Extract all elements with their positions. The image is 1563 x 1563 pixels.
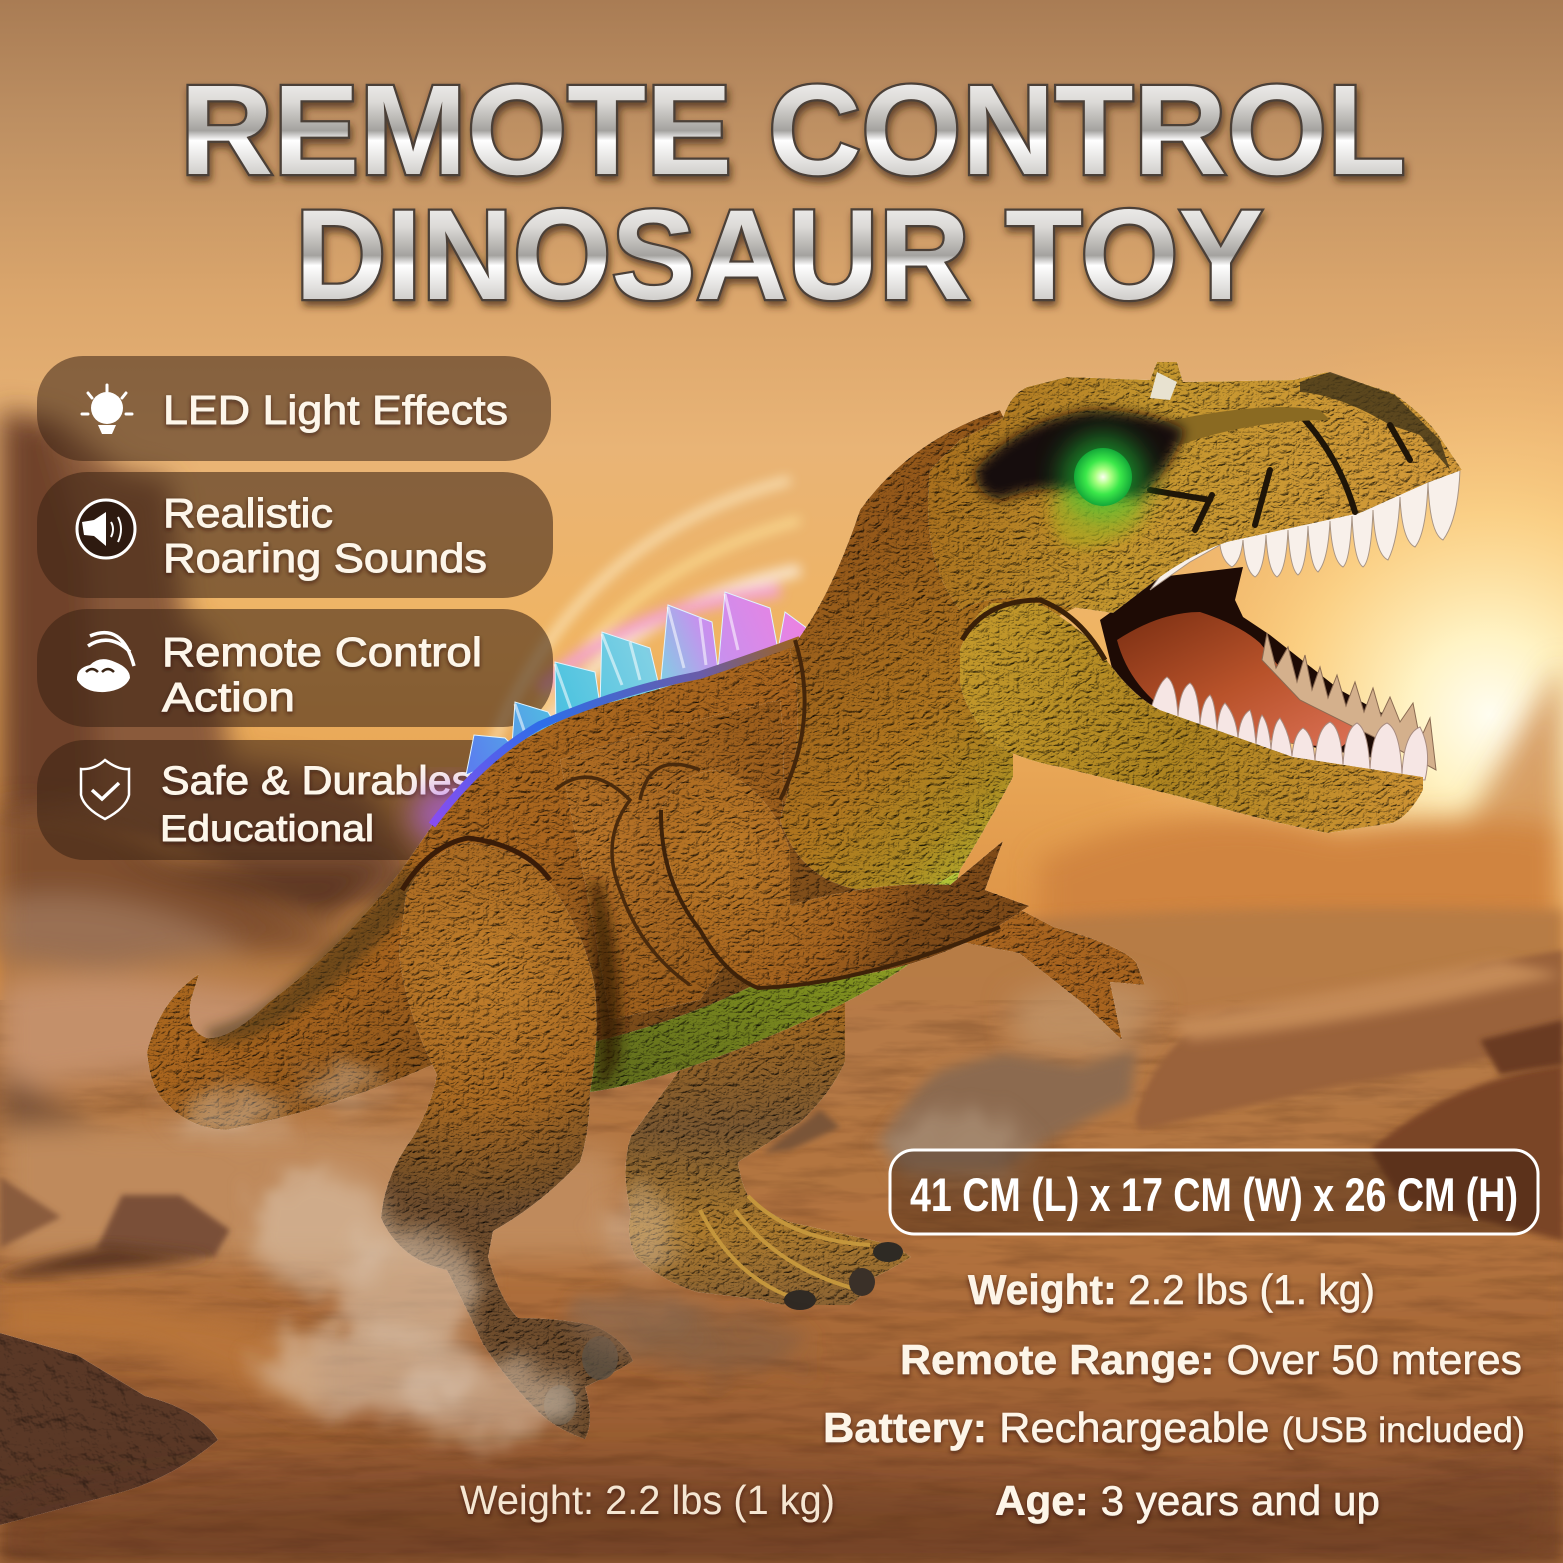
blue LED back edge [432, 640, 800, 825]
specifications list: Remote Range: Over 50 mteres [900, 1336, 1522, 1383]
far lower teeth [1262, 633, 1436, 770]
dust clouds [170, 1067, 1030, 1440]
cheek yellow-green highlight [1050, 492, 1142, 548]
neck [780, 410, 1090, 892]
specifications list: Battery: Rechargeable (USB included) [823, 1404, 1525, 1451]
tongue [1117, 612, 1380, 748]
arm shadow line [661, 810, 1000, 988]
text: Safe and Durables, Educational: Safe & Durables [161, 759, 473, 803]
brow ridge [1150, 407, 1330, 445]
background: sand ground [0, 826, 1563, 1563]
thigh contact shadow [590, 880, 621, 1095]
dorsal LED crystal spikes [466, 592, 812, 775]
panel: Realistic Roaring Sounds [37, 472, 553, 598]
tail dark back shading [205, 865, 425, 1045]
jaw joint shadow [962, 600, 1105, 660]
rocks: right boulders [763, 950, 1563, 1240]
background: distant mesas [0, 410, 1563, 960]
icon: speaker [77, 500, 135, 558]
upper teeth [1150, 470, 1460, 590]
near foot claws [544, 1336, 618, 1425]
far foot toes and claws [700, 1196, 903, 1310]
background: sun glow [1090, 315, 1563, 1115]
text: Safe and Durables, Educational: Educational [160, 808, 374, 849]
thigh crease [402, 838, 550, 890]
shoulder and arm [661, 770, 1029, 988]
background: desert sky [0, 0, 1563, 1000]
neck fold line [780, 640, 805, 800]
icon: remote signal [77, 633, 134, 692]
text: Safe and Durables, Educational [160, 759, 473, 849]
specifications list [823, 1266, 1525, 1524]
background: foreground sand shading [0, 1450, 1563, 1563]
dinosaur toy [147, 362, 1462, 1439]
lower jaw [960, 603, 1423, 833]
background: sand ripples [0, 1000, 1563, 1563]
title: DINOSAUR TOY [295, 184, 1263, 327]
flank light [560, 700, 783, 1020]
dark eye socket [975, 410, 1185, 500]
specifications list: Weight: 2.2 lbs (1. kg) [968, 1266, 1375, 1313]
icon: glowing green eye [1061, 435, 1145, 519]
rocks: lower left boulders [0, 1177, 230, 1525]
panel: Remote Control Action [37, 609, 553, 727]
mouth interior [1100, 567, 1395, 760]
text: Realistic Roaring Sounds [163, 490, 487, 581]
far hind leg [626, 1000, 911, 1305]
secondary weight note: Weight: 2.2 lbs (1 kg) [460, 1477, 835, 1523]
far arm [950, 880, 1145, 1040]
text: Realistic Roaring Sounds: Roaring Sounds [163, 535, 487, 581]
panel: LED Light Effects [37, 356, 551, 461]
near hind leg [381, 843, 633, 1439]
text: Remote Control Action: Remote Control [162, 629, 482, 675]
text: Remote Control Action: Action [162, 674, 295, 720]
icon: shield check [81, 760, 129, 819]
snout top dark markings [1300, 372, 1450, 470]
rainbow motion arcs [480, 480, 800, 790]
lower teeth [1150, 677, 1428, 780]
specifications list: Age: 3 years and up [995, 1477, 1380, 1524]
title [180, 59, 1406, 327]
dimensions badge [890, 1150, 1538, 1234]
head stripes [1150, 420, 1410, 530]
head [928, 362, 1462, 613]
torso and tail [147, 560, 980, 1130]
text: Realistic Roaring Sounds: Realistic [163, 490, 333, 536]
title: REMOTE CONTROL [180, 59, 1406, 202]
body muscle lines [555, 764, 700, 985]
panel: Safe and Durable, Educational [37, 740, 537, 860]
horn tip [1150, 372, 1177, 400]
icon: light bulb [82, 385, 132, 434]
text: LED Light Effects: LED Light Effects [163, 387, 508, 433]
background: left dunes [0, 809, 1160, 1420]
green belly [590, 870, 960, 1092]
purple glow behind back [412, 785, 488, 845]
text: Remote Control Action [162, 629, 482, 720]
